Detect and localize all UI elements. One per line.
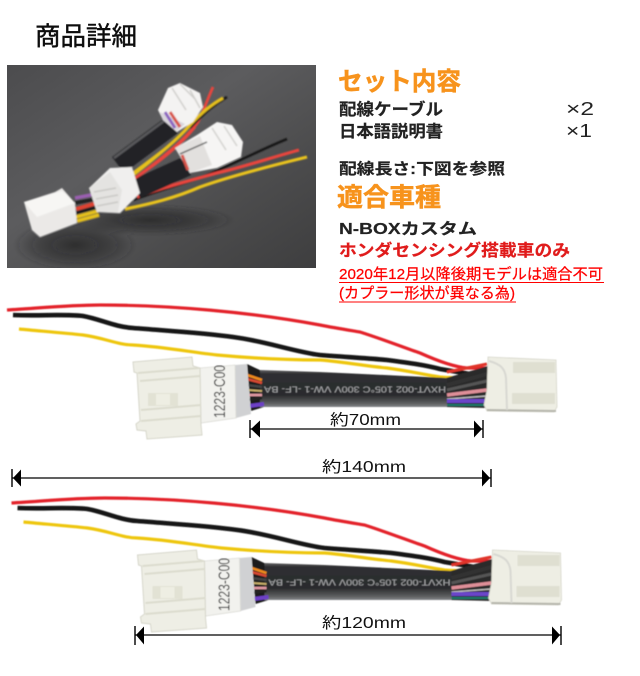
item: wiring cable: 配線ケーブル bbox=[339, 99, 443, 119]
label: 120mm: 約120mm bbox=[322, 614, 406, 632]
sleeves bbox=[118, 125, 172, 165]
cable print: HXVT-002 105°C 300V VW-1 -LF- BA bbox=[263, 384, 446, 394]
left connector bbox=[138, 550, 256, 632]
right connector bbox=[484, 357, 557, 412]
dimension: 70mm bbox=[250, 411, 483, 438]
text block: set contents bbox=[338, 68, 594, 178]
quantity: wiring cable: ×2 bbox=[566, 99, 594, 119]
red note: Honda Sensing: ホンダセンシング搭載車のみ bbox=[339, 240, 570, 260]
inner wires right bbox=[447, 364, 487, 405]
title: 商品詳細 bbox=[35, 23, 137, 51]
photo: product on dark surface bbox=[7, 65, 316, 271]
dimension: 120mm bbox=[135, 614, 561, 645]
wires over sleeve bbox=[132, 129, 188, 173]
cable print: HXVT-002 105°C 300V VW-1 -LF- BA bbox=[268, 578, 450, 586]
connectors bbox=[158, 83, 203, 132]
harness diagram: upper cable bbox=[7, 305, 557, 439]
wire bundle backing bbox=[252, 557, 268, 604]
inner wires left bbox=[252, 568, 268, 599]
wire bundle backing bbox=[247, 364, 264, 411]
note: wire length: 配線長さ:下図を参照 bbox=[339, 159, 505, 178]
vehicle name: N-BOXカスタム bbox=[339, 220, 477, 238]
text block: compatible vehicles bbox=[337, 184, 604, 302]
right connector bbox=[488, 550, 562, 605]
red note: reason: (カプラー形状が異なる為) bbox=[339, 285, 515, 302]
cable sleeve bbox=[260, 370, 447, 407]
left connector bbox=[133, 357, 251, 439]
connector label: 1223-C00 bbox=[212, 365, 229, 418]
red note: model restriction: 2020年12月以降後期モデルは適合不可 bbox=[339, 265, 603, 283]
connector label: 1223-C00 bbox=[216, 558, 234, 611]
label: 140mm: 約140mm bbox=[322, 458, 406, 476]
wires bbox=[12, 498, 490, 571]
inner wires left bbox=[247, 375, 264, 406]
harness diagram: lower cable bbox=[12, 498, 562, 632]
label: 70mm: 約70mm bbox=[330, 411, 401, 429]
heading: set contents: セット内容 bbox=[338, 68, 461, 96]
heading: compatible vehicles: 適合車種 bbox=[337, 184, 441, 212]
wires bbox=[7, 305, 486, 378]
cable sleeve bbox=[264, 563, 452, 600]
wires bbox=[135, 87, 213, 178]
item: manual: 日本語説明書 bbox=[339, 121, 443, 141]
quantity: manual: ×1 bbox=[566, 121, 592, 141]
inner wires right bbox=[452, 557, 492, 598]
dimension: 140mm bbox=[12, 458, 491, 487]
